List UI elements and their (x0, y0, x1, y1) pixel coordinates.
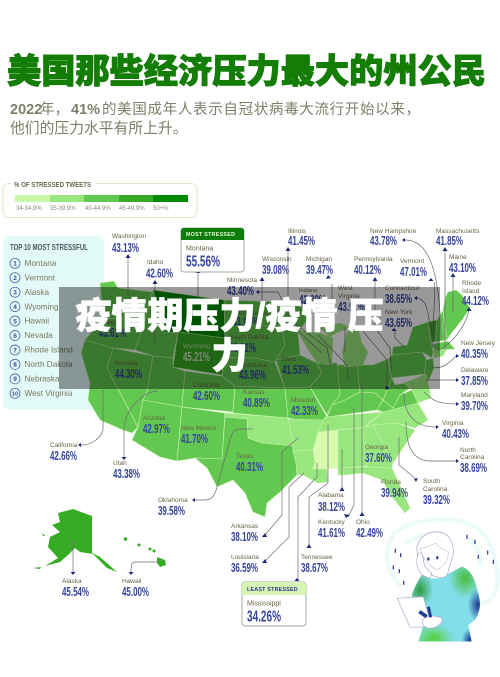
state value labels: New Hampshire (370, 228, 417, 235)
state value labels: South (423, 478, 440, 485)
state value labels: North (460, 447, 476, 454)
state value labels: 38.10% (231, 530, 258, 544)
state value labels: 39.58% (158, 504, 185, 518)
state value labels: Idaho (147, 259, 164, 266)
state value labels: 41.45% (288, 234, 315, 248)
state value labels: 42.97% (143, 422, 170, 436)
state value labels: New York (385, 309, 413, 316)
state value labels: 42.33% (291, 404, 318, 418)
state value labels: 43.61% (99, 326, 126, 340)
state value labels: Wyoming (183, 343, 210, 350)
panel: top 10 most stressful: 2 (13, 275, 17, 282)
panel: top 10 most stressful: 8 (13, 362, 17, 369)
state value labels (50, 228, 496, 599)
state value labels: Michigan (306, 256, 332, 263)
state value labels: 43.96% (239, 368, 266, 382)
state value labels: Kansas (243, 389, 265, 396)
state value labels: 43.10% (449, 261, 476, 275)
state value labels: Pennsylvania (354, 256, 393, 263)
panel: top 10 most stressful: 10 (12, 392, 18, 398)
state value labels: Washington (112, 233, 146, 240)
state value labels: 41.53% (282, 363, 309, 377)
panel: top 10 most stressful: North Dakota (24, 360, 73, 369)
panel: top 10 most stressful: 4 (13, 304, 17, 311)
callout: least stressed Mississippi: LEAST STRESSED (247, 587, 298, 593)
state value labels: Connecticut (385, 285, 420, 292)
map of the contiguous United States (81, 281, 470, 517)
illustration: stressed woman with tablet (387, 519, 498, 653)
state value labels: 44.30% (115, 367, 142, 381)
panel: top 10 most stressful: 6 (13, 333, 17, 340)
state value labels: Arizona (143, 415, 165, 422)
state value labels: Island (462, 288, 480, 295)
leader lines (70, 238, 472, 581)
state value labels: Nebraska (239, 362, 267, 369)
state value labels: 42.60% (193, 389, 220, 403)
state value labels: 43.90% (232, 315, 259, 329)
state value labels: Louisiana (231, 554, 259, 561)
legend: percent of stressed tweets: 40-44.9% (85, 206, 111, 212)
state value labels: 41.85% (436, 234, 463, 248)
state value labels: 37.60% (365, 451, 392, 465)
callout: least stressed Mississippi (242, 582, 306, 626)
title: 美国那些经济压力最大的州公民 (7, 44, 486, 93)
state value labels: 43.13% (112, 241, 139, 255)
state value labels: Missouri (291, 397, 315, 404)
state value labels: 39.94% (381, 486, 408, 500)
state value labels: Rhode (462, 280, 482, 287)
state value labels: 40.89% (243, 396, 270, 410)
state value labels: Georgia (365, 444, 389, 451)
state value labels: 40.31% (236, 460, 263, 474)
panel: top 10 most stressful: Alaska (24, 288, 50, 297)
panel: top 10 most stressful: Wyoming (24, 302, 59, 311)
panel: top 10 most stressful: Nebraska (24, 375, 60, 384)
state value labels: Maryland (461, 392, 488, 399)
state value labels: 42.66% (50, 449, 77, 463)
state value labels: 41.61% (318, 526, 345, 540)
state value labels: 36.59% (231, 561, 258, 575)
overlay band (59, 287, 440, 389)
overlay heading: 力 (211, 335, 248, 376)
state value labels: North Dakota (232, 310, 271, 317)
panel: top 10 most stressful: Rhode Island (24, 346, 73, 355)
state value labels: Wisconsin (262, 256, 292, 263)
state value labels: Alaska (62, 578, 82, 585)
panel: top 10 most stressful: West Virginia (24, 389, 73, 398)
state value labels: New Mexico (181, 425, 217, 432)
state value labels: 43.91% (338, 300, 365, 314)
state value labels: Delaware (461, 367, 489, 374)
panel: top 10 most stressful: Nevada (24, 331, 53, 340)
state value labels: Virginia (442, 420, 464, 427)
panel: top 10 most stressful: TOP 10 MOST STRESSFUL (10, 243, 88, 252)
state value labels: Minnesota (227, 277, 257, 284)
state value labels: 45.00% (122, 585, 149, 599)
panel: top 10 most stressful: Vermont (24, 273, 56, 282)
state value labels: California (50, 442, 78, 449)
subtitle: 41% (71, 102, 100, 118)
subtitle: 他们的压力水平有所上升。 (10, 120, 188, 137)
state value labels: Nevada (115, 360, 138, 367)
legend: percent of stressed tweets: % OF STRESSED TWEETS (14, 180, 91, 189)
panel: top 10 most stressful: 1 (13, 261, 17, 268)
state value labels: 42.60% (146, 266, 173, 280)
subtitle: 年， (40, 101, 69, 118)
state value labels: 38.12% (318, 500, 345, 514)
state value labels: Hawaii (122, 578, 142, 585)
state value labels: Oklahoma (158, 497, 188, 504)
state value labels: 42.49% (356, 526, 383, 540)
state value labels: 39.08% (262, 263, 289, 277)
callout: least stressed Mississippi: Mississippi (247, 600, 281, 608)
state value labels: Florida (381, 479, 401, 486)
state value labels: Carolina (423, 486, 448, 493)
state value labels: Iowa (282, 356, 296, 363)
state value labels: New Jersey (461, 340, 496, 347)
state value labels: Carolina (460, 454, 485, 461)
state value labels: Vermont (400, 258, 424, 265)
state value labels: 45.54% (62, 585, 89, 599)
main graphic (2, 182, 500, 642)
callout: most stressed Montana: 55.56% (186, 254, 220, 270)
state value labels: 39.32% (423, 493, 450, 507)
state value labels: 38.65% (385, 292, 412, 306)
callout: most stressed Montana: Montana (186, 246, 213, 252)
state value labels: Texas (236, 453, 254, 460)
state value labels: West (338, 285, 353, 292)
state value labels: Alabama (318, 492, 344, 499)
state value labels: South Dakota (229, 334, 269, 341)
overlay heading (75, 295, 384, 376)
panel: top 10 most stressful: 9 (13, 376, 17, 383)
state value labels: 43.91% (229, 341, 256, 355)
callout: most stressed Montana: MOST STRESSED (186, 232, 235, 238)
state value labels: 40.12% (354, 263, 381, 277)
subtitle: 的美国成年人表示自冠状病毒大流行开始以来， (102, 101, 420, 118)
subtitle: 2022 (10, 102, 42, 118)
legend: percent of stressed tweets: 34-34.9% (16, 206, 42, 212)
state value labels: Indiana (299, 288, 318, 294)
overlay heading: 疫情期压力/疫情 压 (75, 295, 384, 336)
legend: percent of stressed tweets (3, 178, 197, 218)
panel: top 10 most stressful: Montana (24, 259, 57, 268)
callout: least stressed Mississippi: 34.26% (247, 608, 281, 626)
state value labels: Illinois (288, 228, 307, 235)
legend: percent of stressed tweets: 35-39.9% (50, 206, 76, 212)
subtitle (10, 101, 420, 137)
state value labels: Oregon (100, 319, 122, 326)
state value labels: 47.01% (400, 265, 427, 279)
state value labels: 42.30% (299, 293, 326, 307)
legend: percent of stressed tweets: 45-49.9% (119, 206, 145, 212)
state value labels: 43.65% (385, 316, 412, 330)
state value labels: 40.43% (442, 427, 469, 441)
panel: top 10 most stressful: 3 (13, 290, 17, 296)
state value labels: Arkansas (231, 523, 259, 530)
state value labels: 41.70% (181, 432, 208, 446)
state value labels: 43.38% (113, 467, 140, 481)
state value labels: Massachusetts (436, 228, 480, 235)
panel: top 10 most stressful (3, 236, 104, 410)
state value labels: 43.40% (227, 284, 254, 298)
state value labels: Tennessee (301, 554, 333, 561)
state value labels: Kentucky (318, 519, 345, 526)
state value labels: 39.47% (306, 263, 333, 277)
state value labels: Ohio (356, 519, 370, 526)
panel: top 10 most stressful: 5 (13, 318, 17, 325)
state value labels: Utah (113, 460, 127, 467)
legend: percent of stressed tweets: 50+% (153, 206, 169, 212)
state value labels: 43.78% (370, 234, 397, 248)
map: Alaska and Hawaii (33, 509, 166, 572)
state value labels: Colorado (193, 382, 220, 389)
panel: top 10 most stressful: Hawaii (24, 317, 49, 326)
panel: top 10 most stressful: 7 (13, 347, 17, 354)
state value labels: 38.67% (301, 561, 328, 575)
state value labels: 45.21% (183, 350, 210, 364)
callout: most stressed Montana (181, 228, 244, 272)
state value labels: Maine (449, 254, 467, 261)
state value labels: Virginia (338, 293, 360, 300)
